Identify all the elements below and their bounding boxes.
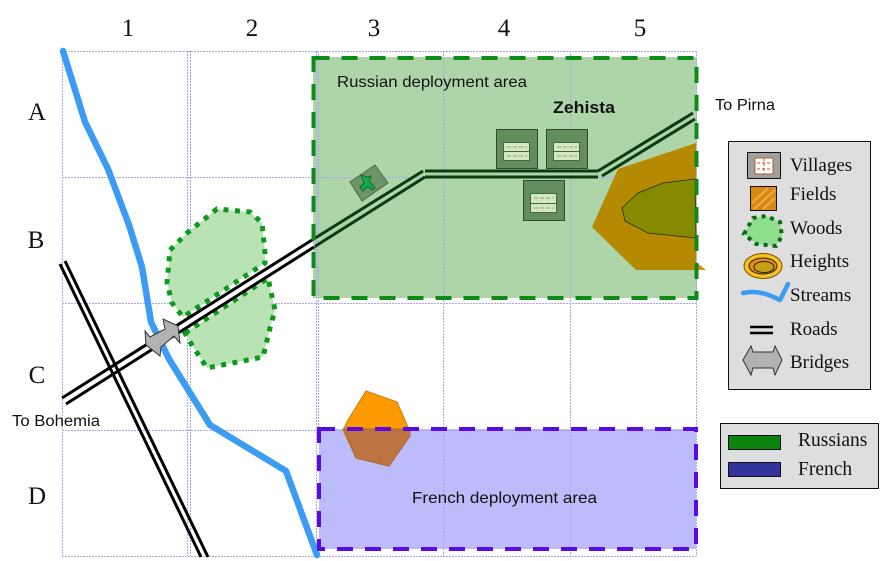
icon: field key <box>750 186 776 210</box>
legend labels: Woods <box>790 218 842 239</box>
column labels: 2 <box>246 15 258 42</box>
icon: road key <box>750 327 773 333</box>
row labels <box>28 99 46 510</box>
label: Zehista: Zehista <box>553 98 616 117</box>
icon: stream key <box>743 284 788 300</box>
bridge <box>145 319 180 356</box>
legend labels: Heights <box>790 251 849 272</box>
legend: terrain key <box>728 142 870 390</box>
icon: village key <box>748 152 780 178</box>
swatch: French <box>728 462 780 476</box>
row labels: C <box>29 362 45 389</box>
French area border <box>319 429 696 549</box>
village: south <box>524 180 564 220</box>
road to Pirna <box>312 113 695 247</box>
legend labels: Streams <box>790 285 851 306</box>
forces labels <box>798 430 867 480</box>
village: west <box>496 130 538 168</box>
woods: south <box>185 278 275 368</box>
label: Russian deployment area: Russian deployment area <box>337 74 527 91</box>
village: east <box>546 130 588 168</box>
legend: forces key <box>720 424 878 488</box>
legend labels: Villages <box>790 155 852 176</box>
legend labels <box>790 155 852 373</box>
Russian area border <box>314 58 696 298</box>
stream <box>63 51 317 555</box>
label: French deployment area: French deployment area <box>412 490 597 507</box>
column labels: 4 <box>498 15 511 42</box>
label: To Pirna: To Pirna <box>715 97 775 114</box>
legend labels: Fields <box>790 184 836 205</box>
panel: Russian deployment area <box>313 57 697 298</box>
label: To Bohemia: To Bohemia <box>12 413 100 430</box>
forces labels: Russians <box>798 430 867 451</box>
swatch: Russians <box>728 436 780 450</box>
column labels: 5 <box>634 15 646 42</box>
heights near Zehista <box>592 143 706 270</box>
panel: French deployment area fill <box>319 429 696 549</box>
column labels: 3 <box>368 15 380 42</box>
road to Bohemia <box>62 240 314 404</box>
icon: bridge key <box>743 346 782 375</box>
row labels: A <box>28 99 46 126</box>
row labels: B <box>28 227 44 254</box>
column labels <box>122 15 646 42</box>
fields <box>343 391 410 466</box>
woods: north <box>167 209 265 317</box>
icon: church <box>350 165 388 201</box>
crossing road <box>60 261 208 557</box>
forces labels: French <box>798 459 852 480</box>
column labels: 1 <box>122 15 134 42</box>
icon: woods key <box>744 216 782 246</box>
legend labels: Roads <box>790 319 838 340</box>
legend labels: Bridges <box>790 352 849 373</box>
row labels: D <box>28 483 46 510</box>
icon: heights key <box>744 254 782 278</box>
